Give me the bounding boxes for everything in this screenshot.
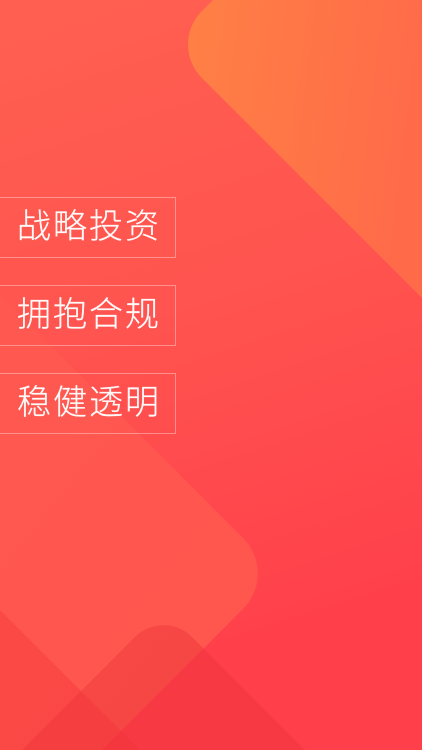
dark rounded diamond, bottom centre xyxy=(20,625,307,750)
dark triangle, bottom left xyxy=(0,600,142,750)
tag: strategic investment: 战略投资 xyxy=(17,208,161,246)
tag: strategic investment xyxy=(0,197,176,258)
tag: steady and transparent xyxy=(0,373,176,434)
tag: embrace compliance: 拥抱合规 xyxy=(17,296,161,334)
orange rounded diamond, top right xyxy=(188,0,422,298)
tag: steady and transparent: 稳健透明 xyxy=(17,384,161,422)
light rounded diamond, lower left xyxy=(0,285,258,750)
tag: embrace compliance xyxy=(0,285,176,346)
